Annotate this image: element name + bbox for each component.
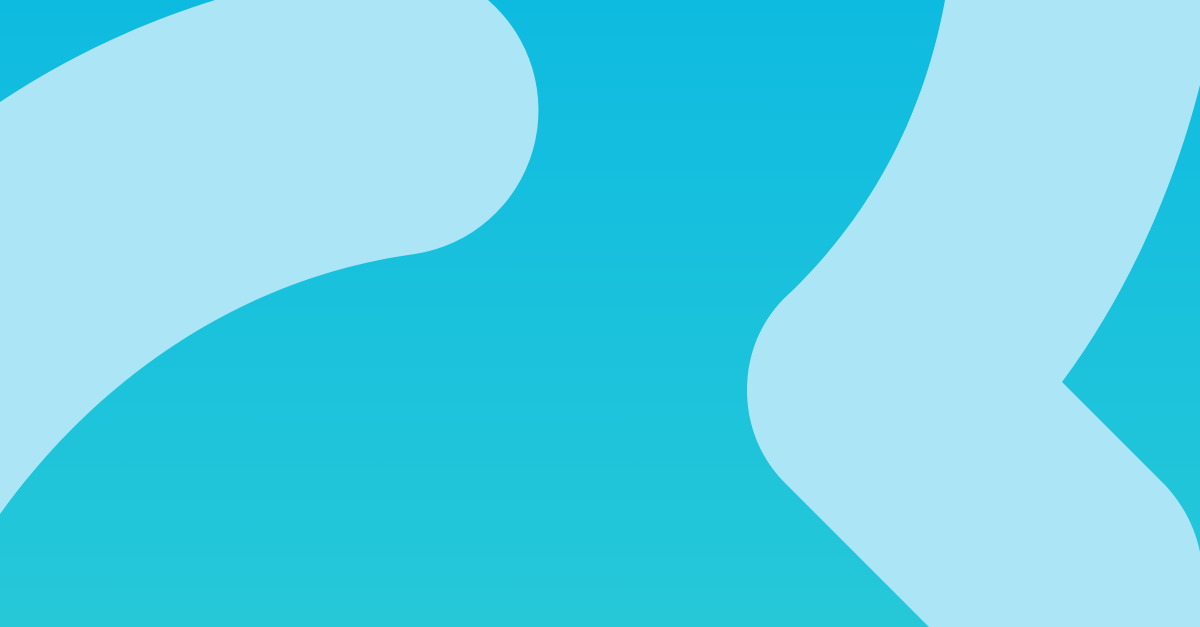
right chevron curved shape <box>747 0 1200 627</box>
left curved rounded shape <box>0 0 538 514</box>
